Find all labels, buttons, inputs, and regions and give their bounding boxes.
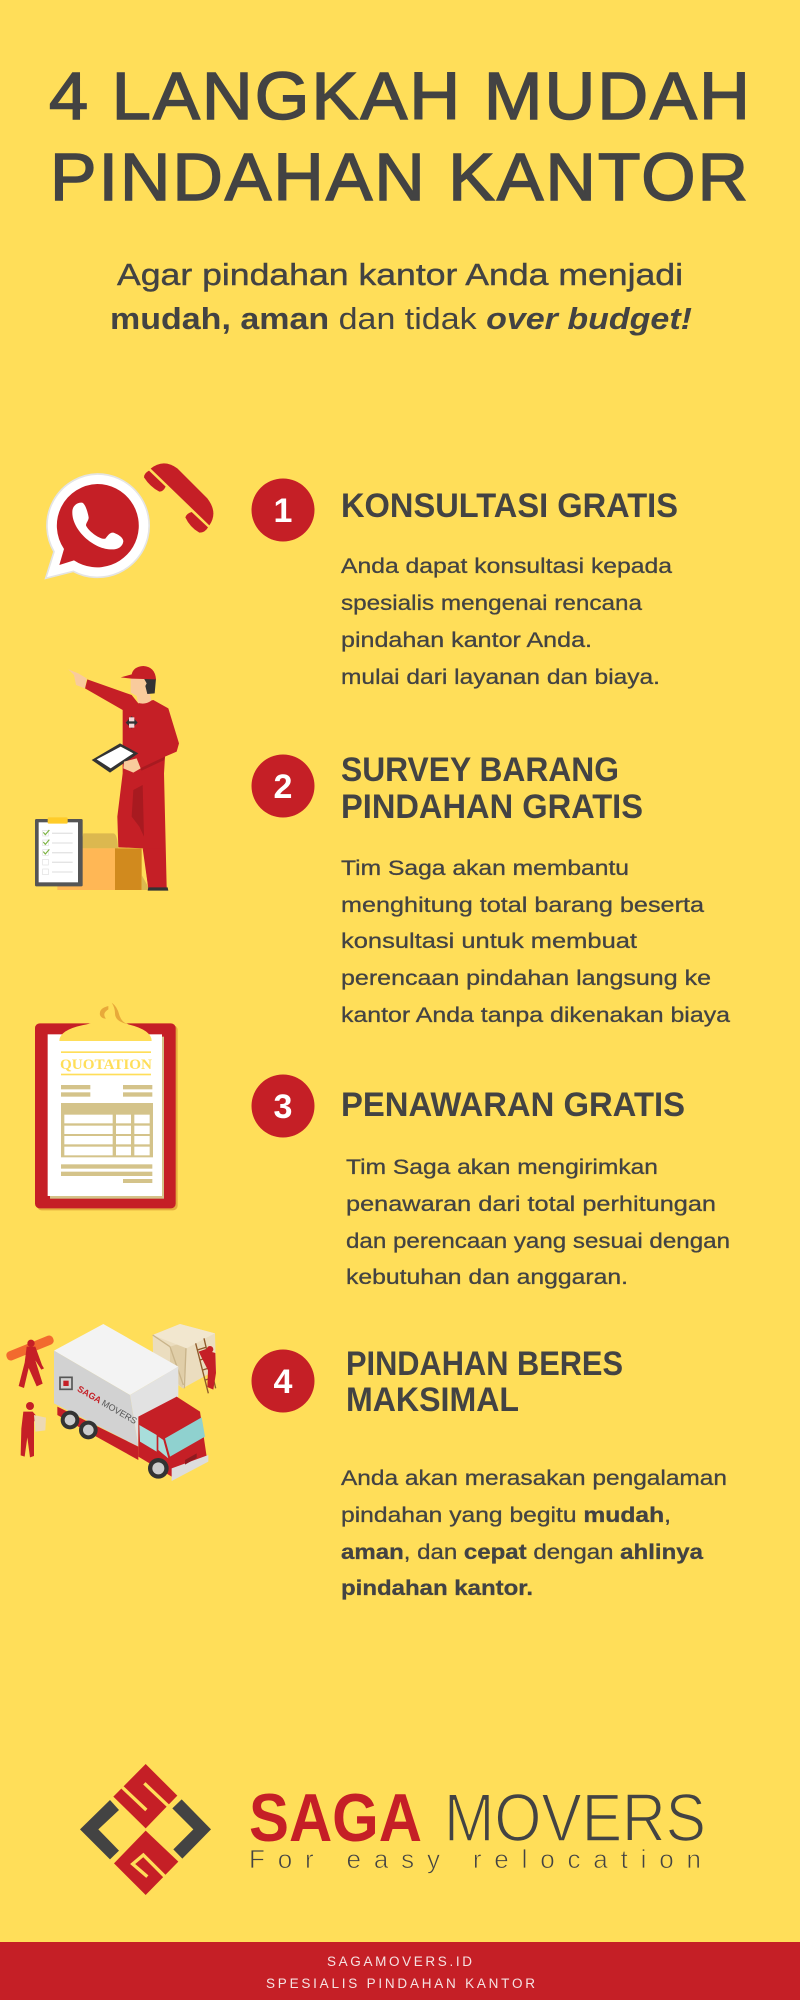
logo mark (80, 1764, 211, 1895)
logo wordmark: MOVERS (444, 1780, 706, 1856)
heading 4: MAKSIMAL (346, 1381, 519, 1419)
title: PINDAHAN KANTOR (50, 140, 750, 215)
logo wordmark: SAGA (249, 1780, 422, 1856)
body text 1: pindahan kantor Anda. (341, 628, 592, 652)
step 1 (252, 478, 678, 689)
heading 4: PINDAHAN BERES (346, 1345, 623, 1383)
body text 3: dan perencaan yang sesuai dengan (346, 1229, 730, 1253)
step 3 (252, 1074, 730, 1289)
number badge 4 (252, 1350, 314, 1412)
heading 4 (346, 1345, 623, 1419)
body text 4: Anda akan merasakan pengalaman (341, 1466, 727, 1490)
number badge 1: 1 (274, 492, 292, 530)
logo wordmark (249, 1780, 706, 1874)
body text 3: penawaran dari total perhitungan (346, 1192, 716, 1216)
number badge 3 (252, 1074, 314, 1138)
body text 1: mulai dari layanan dan biaya. (341, 665, 660, 689)
body text 2: kantor Anda tanpa dikenakan biaya (341, 1003, 730, 1027)
title (49, 59, 752, 215)
body text 4: pindahan yang begitu mudah , (341, 1503, 671, 1527)
number badge 1 (252, 478, 314, 542)
body text 3 (346, 1155, 730, 1289)
subtitle: mudah, aman dan tidak over budget! (110, 301, 692, 336)
title: 4 LANGKAH MUDAH (49, 59, 752, 134)
number badge 4: 4 (274, 1363, 293, 1401)
step 2 (252, 751, 730, 1027)
icon: moving truck with workers (5, 1324, 216, 1481)
heading 2: PINDAHAN GRATIS (341, 788, 643, 826)
body text 1: Anda dapat konsultasi kepada (341, 554, 672, 578)
footer bar: SPESIALIS PINDAHAN KANTOR (266, 1976, 535, 1991)
icon: surveyor with clipboard and boxes (35, 666, 179, 891)
heading 2: SURVEY BARANG (341, 751, 619, 789)
body text 2 (341, 856, 730, 1027)
number badge 3: 3 (274, 1088, 292, 1126)
footer bar: SAGAMOVERS.ID (327, 1954, 472, 1969)
subtitle: Agar pindahan kantor Anda menjadi (117, 257, 683, 292)
body text 2: konsultasi untuk membuat (341, 929, 637, 953)
body text 1: spesialis mengenai rencana (341, 591, 642, 615)
number badge 2 (252, 754, 314, 818)
body text 4: pindahan kantor. (341, 1576, 533, 1600)
body text 1 (341, 554, 672, 689)
body text 4 (341, 1466, 727, 1600)
body text 2: Tim Saga akan membantu (341, 856, 629, 880)
icon: whatsapp bubble and phone (46, 463, 213, 578)
subtitle (110, 257, 692, 336)
heading 2 (341, 751, 643, 826)
body text 3: kebutuhan dan anggaran. (346, 1265, 628, 1289)
icon: quotation clipboard (35, 1003, 178, 1210)
number badge 2: 2 (274, 768, 292, 806)
icon: quotation clipboard: QUOTATION (60, 1057, 152, 1073)
icon: moving truck with workers: SAGA MOVERS (76, 1384, 139, 1426)
footer bar (0, 1942, 800, 2000)
heading 3: PENAWARAN GRATIS (341, 1086, 685, 1124)
logo wordmark: For easy relocation (249, 1844, 701, 1874)
step 4 (252, 1345, 727, 1600)
body text 2: menghitung total barang beserta (341, 893, 704, 917)
body text 4: aman , dan cepat dengan ahlinya (341, 1540, 704, 1564)
body text 2: perencaan pindahan langsung ke (341, 966, 711, 990)
heading 1: KONSULTASI GRATIS (341, 487, 678, 525)
body text 3: Tim Saga akan mengirimkan (346, 1155, 658, 1179)
